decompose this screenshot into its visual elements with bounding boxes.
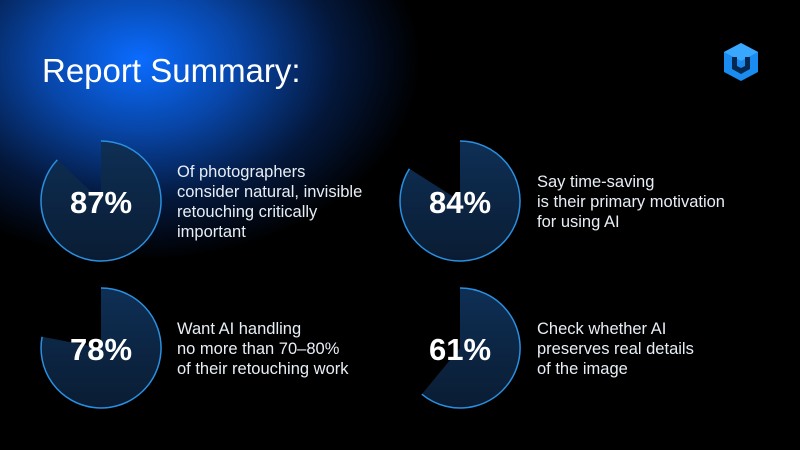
text: 78%: of their retouching work [177,360,349,378]
text: 87%: retouching critically [177,203,317,221]
pie: 84%: 84% [429,185,491,220]
title: Report Summary: [42,52,301,89]
text: 78% [177,320,349,378]
pie: 87% [41,141,161,261]
text: 78%: Want AI handling [177,320,301,338]
pie: 61%: 61% [429,332,491,367]
text: 84%: is their primary motivation [537,193,725,211]
pie: 78%: 78% [70,332,132,367]
text: 61% [537,320,694,378]
icon: logo cube [724,43,758,81]
text: 87%: important [177,223,246,241]
pie: 84% [400,141,520,261]
text: 61%: of the image [537,360,628,378]
text: 87% [177,163,362,241]
pie: 87%: 87% [70,185,132,220]
text: 84%: for using AI [537,213,620,231]
pie: 78% [41,288,161,408]
text: 87%: consider natural, invisible [177,183,362,201]
text: 84%: Say time-saving [537,173,654,191]
text: 87%: Of photographers [177,163,305,181]
text: 84% [537,173,725,231]
pie: 61% [422,288,520,408]
text: 61%: preserves real details [537,340,694,358]
text: 61%: Check whether AI [537,320,666,338]
text: 78%: no more than 70–80% [177,340,339,358]
